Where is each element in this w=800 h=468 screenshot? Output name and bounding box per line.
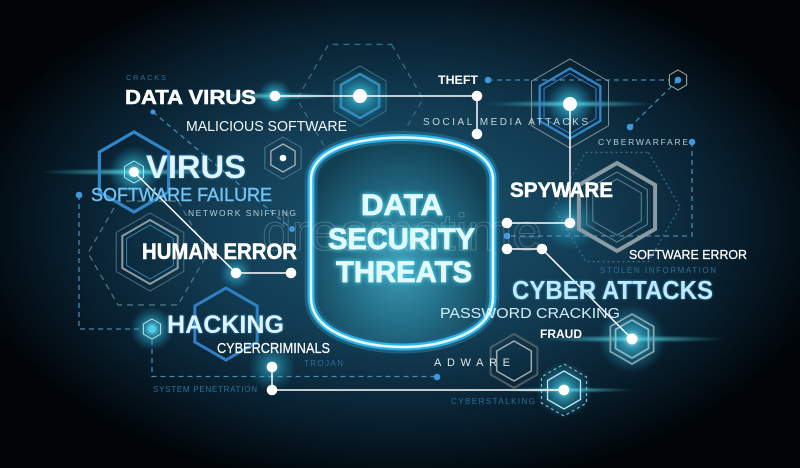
white connectors: [134, 96, 632, 390]
label: data virus: DATA VIRUS: [125, 87, 256, 109]
title: DATA: [361, 189, 443, 222]
icon: virus hexagon: [99, 132, 169, 212]
title glow: DATA: [361, 189, 443, 222]
label: cyberstalking: CYBERSTALKING: [451, 397, 535, 406]
label: social media attacks: SOCIAL MEDIA ATTACKS: [423, 117, 588, 128]
title glow: [328, 189, 475, 289]
label: human error: HUMAN ERROR: [142, 239, 297, 264]
large blue word glows: VIRUS: [146, 149, 246, 185]
label: network sniffing: NETWORK SNIFFING: [188, 208, 296, 218]
icon: small left hexagon: [143, 319, 161, 339]
watermark: dreamstime: [262, 204, 542, 262]
label: adware: ADWARE: [434, 357, 510, 369]
label: spyware: SPYWARE: [510, 179, 613, 202]
large blue word glows: CYBER ATTACKS: [512, 275, 713, 305]
icon: cyberstalking hexagon: [541, 364, 587, 416]
label: virus: VIRUS: [146, 149, 246, 185]
lens flares: [39, 70, 727, 418]
large blue word glows: [146, 149, 713, 339]
dashed connectors: [79, 80, 692, 376]
large blue word glows: HACKING: [167, 311, 284, 339]
title: [328, 189, 475, 289]
label: cybercriminals: CYBERCRIMINALS: [217, 340, 330, 357]
icon: grey hexagon: [579, 163, 655, 251]
label: cracks: CRACKS: [126, 73, 166, 82]
icon: spyware top hexagon: [531, 59, 609, 148]
icon: small hexagon: [265, 137, 301, 179]
label: software failure: SOFTWARE FAILURE: [91, 185, 272, 205]
title: SECURITY: [328, 223, 475, 256]
label: software error: SOFTWARE ERROR: [629, 247, 747, 262]
icon: top centre hexagon: [334, 66, 386, 126]
label: hacking: HACKING: [167, 311, 284, 339]
title: THREATS: [336, 256, 472, 289]
icon: top right small hexagon: [669, 70, 687, 90]
title glow: THREATS: [336, 256, 472, 289]
white connector dots: [129, 89, 638, 395]
label: fraud: FRAUD: [540, 327, 582, 341]
title glow: SECURITY: [328, 223, 475, 256]
label: stolen information: STOLEN INFORMATION: [600, 266, 716, 275]
label: system penetration: SYSTEM PENETRATION: [153, 385, 257, 394]
icon: adware hexagon: [491, 334, 537, 388]
label: theft: THEFT: [438, 73, 479, 87]
label: cyber attacks: CYBER ATTACKS: [512, 275, 713, 305]
central shield frame: [311, 138, 493, 347]
label: cyberwarfare: CYBERWARFARE: [598, 137, 688, 147]
dashed hexagon outlines: [73, 17, 696, 331]
icon: cyber attacks hexagon: [610, 314, 654, 364]
label: password cracking: PASSWORD CRACKING: [440, 305, 620, 322]
icon: hacking hexagon: [195, 288, 257, 360]
icon: human error hexagon: [116, 213, 184, 291]
label: malicious software: MALICIOUS SOFTWARE: [186, 118, 347, 135]
label: trojan: TROJAN: [304, 359, 343, 368]
blue connector dots: [76, 77, 695, 380]
